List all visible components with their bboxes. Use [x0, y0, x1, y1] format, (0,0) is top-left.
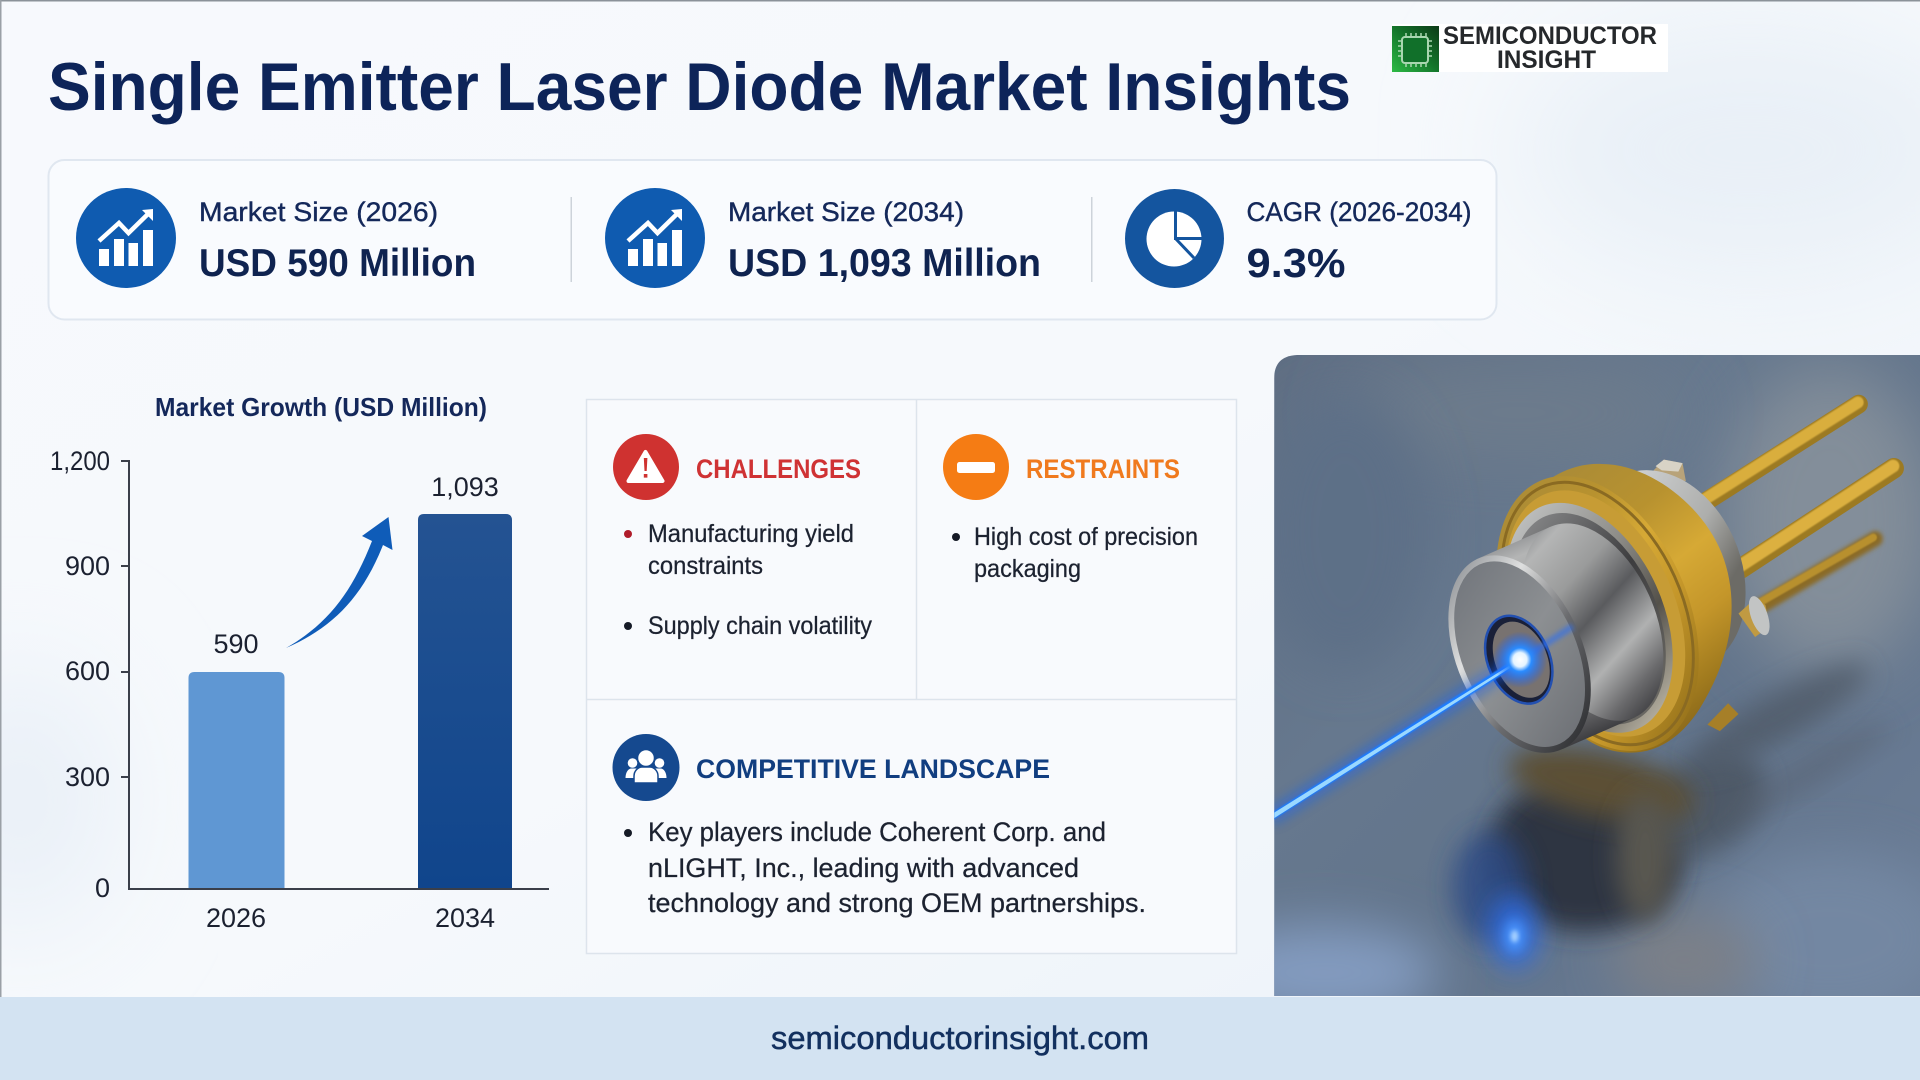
- bullets: challenges: Supply chain volatility: [648, 612, 872, 640]
- stat: market size 2034: USD 1,093 Million: [728, 242, 1041, 285]
- stat: cagr: [1246, 197, 1472, 286]
- y axis labels: [50, 446, 110, 903]
- bullets: challenges: Manufacturing yield: [648, 520, 854, 548]
- arrow: growth: [286, 517, 392, 648]
- bullets: restraints: High cost of precision: [974, 523, 1198, 551]
- bar: 2026: [188, 672, 284, 888]
- icon: minus: [943, 434, 1009, 500]
- gold flange: [1497, 464, 1732, 753]
- value labels: 1,093: [431, 472, 499, 502]
- footer: [0, 997, 1920, 1080]
- lens: [1484, 614, 1576, 705]
- stat: cagr: CAGR (2026-2034): [1246, 197, 1472, 227]
- value labels: 590: [213, 629, 259, 659]
- value labels: 2026: [206, 903, 266, 933]
- text: key players: [624, 817, 1146, 918]
- heading: competitive landscape: COMPETITIVE LANDSCAPE: [696, 754, 1050, 784]
- logo: INSIGHT: [1497, 46, 1596, 74]
- laser beam: [1270, 631, 1547, 821]
- stat: market size 2026: USD 590 Million: [199, 242, 476, 285]
- stat: market size 2026: [199, 197, 476, 285]
- icon: people: [612, 734, 680, 801]
- photo: laser diode: [1274, 355, 1920, 996]
- panel: challenges: [613, 434, 872, 640]
- rear silver base: [1637, 470, 1746, 652]
- icon: growth chart 2026: [76, 188, 176, 288]
- icon: growth chart 2034: [605, 188, 705, 288]
- logo: [1392, 22, 1668, 74]
- stat: cagr: 9.3%: [1246, 240, 1346, 286]
- value labels: [206, 472, 499, 933]
- bullets: restraints: packaging: [974, 555, 1081, 583]
- nut: side and gold tab: [1707, 593, 1774, 731]
- y axis labels: 1,200: [50, 446, 110, 476]
- icon: chip: [1392, 26, 1439, 72]
- panel: restraints: [943, 434, 1198, 583]
- chart title: Market Growth (USD Million): [155, 392, 487, 422]
- nut: top: [1654, 460, 1686, 482]
- stat: market size 2034: Market Size (2034): [728, 197, 964, 227]
- stat: market size 2026: Market Size (2026): [199, 197, 438, 227]
- y axis labels: 600: [65, 656, 110, 686]
- y axis labels: 0: [95, 873, 110, 903]
- footer: semiconductorinsight.com: [771, 1020, 1149, 1056]
- bullets: challenges: [624, 520, 872, 640]
- text: key players: Key players include Coherent Corp. and: [648, 817, 1106, 847]
- heading: challenges: CHALLENGES: [696, 454, 861, 484]
- icon: pie chart: [1125, 189, 1224, 288]
- text: key players: nLIGHT, Inc., leading with advanced: [648, 853, 1079, 883]
- value labels: 2034: [435, 903, 495, 933]
- pins: [1701, 402, 1894, 607]
- logo: SEMICONDUCTOR: [1443, 22, 1657, 50]
- stat: market size 2034: [728, 197, 1041, 285]
- bullets: restraints: [952, 523, 1198, 583]
- title: Single Emitter Laser Diode Market Insights: [48, 49, 1351, 125]
- heading: restraints: RESTRAINTS: [1026, 454, 1180, 484]
- panel: insights: [586, 400, 1236, 954]
- y axis labels: 300: [65, 762, 110, 792]
- shadow and reflection: [1452, 647, 1894, 968]
- silver ring: [1510, 502, 1673, 733]
- cap face: [1448, 556, 1591, 753]
- metal cap: [1476, 523, 1664, 749]
- panel: key stats: [48, 160, 1496, 320]
- bar: 2034: [418, 514, 512, 888]
- panel: competitive landscape: [612, 734, 1146, 918]
- bar chart: market growth: [50, 392, 549, 933]
- text: key players: technology and strong OEM partnerships.: [648, 888, 1146, 918]
- y axis labels: 900: [65, 551, 110, 581]
- icon: warning: [613, 434, 679, 500]
- bullets: challenges: constraints: [648, 552, 763, 580]
